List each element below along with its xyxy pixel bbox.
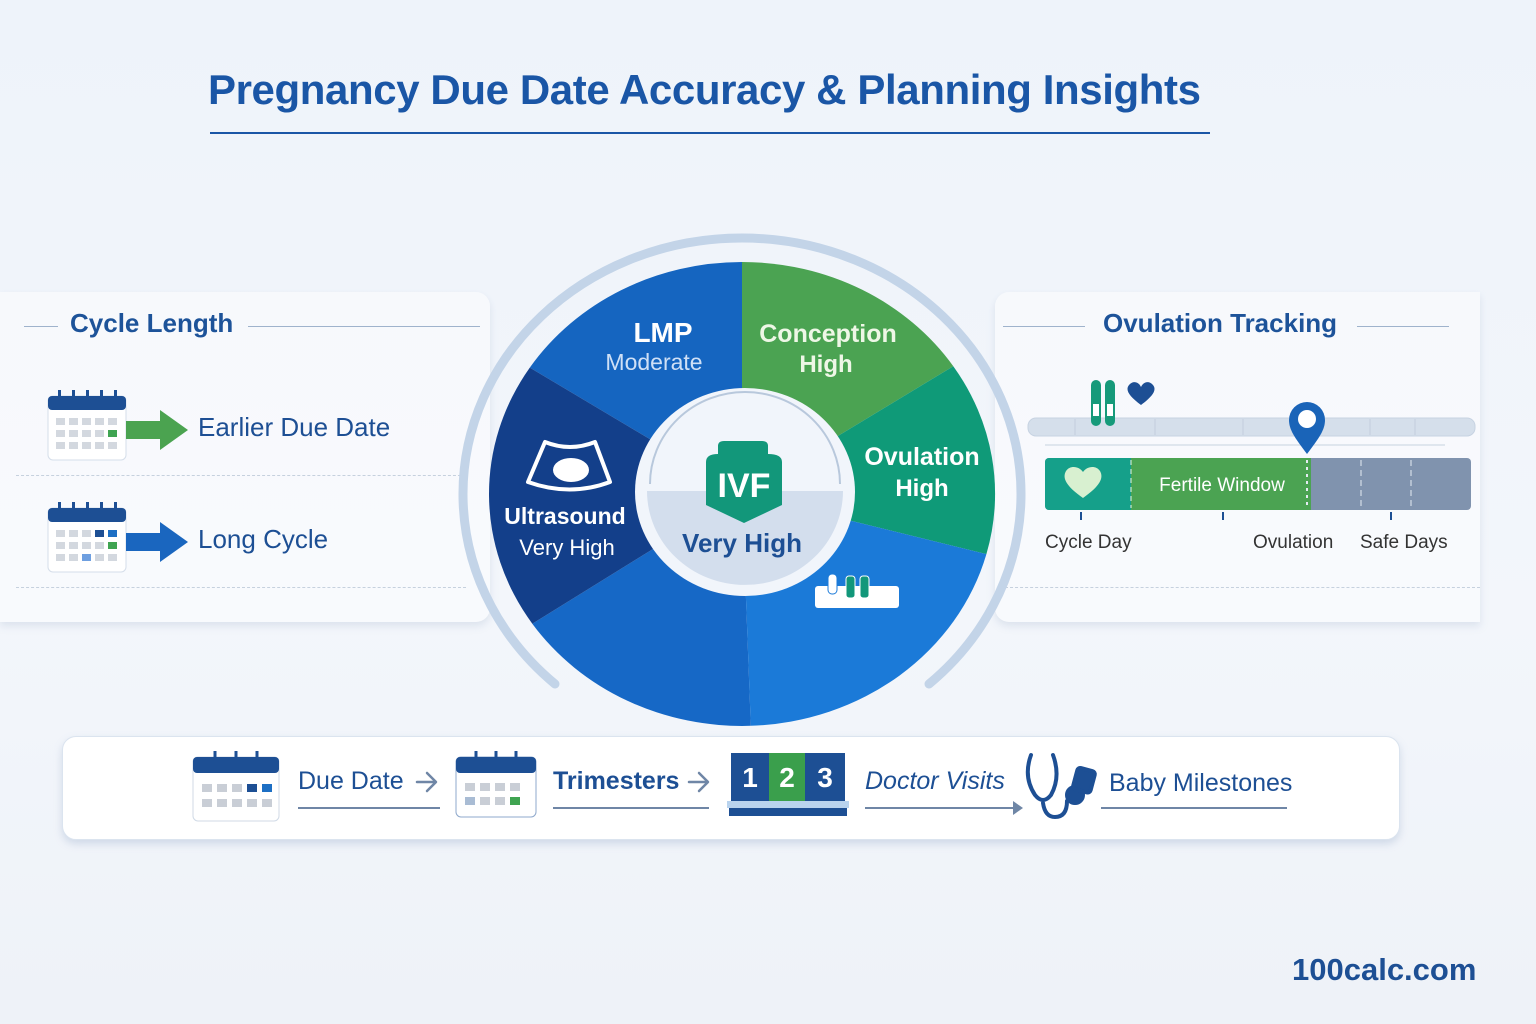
heading: ovulation tracking: Ovulation Tracking <box>1103 308 1337 338</box>
timeline chart: Cycle Day <box>1045 532 1132 553</box>
segment: lower right <box>742 494 986 726</box>
flow text: Due Date <box>298 767 404 795</box>
icon: test tubes tray <box>815 574 899 608</box>
arrows <box>417 773 708 791</box>
icon: calendar due date <box>193 751 279 821</box>
icon: calendar trimesters <box>456 751 536 817</box>
segment: ultrasound <box>489 368 742 624</box>
label: LMP: LMP <box>633 317 693 348</box>
label: ultrasound <box>504 503 626 560</box>
icon: stethoscope <box>1028 755 1096 817</box>
title: Pregnancy Due Date Accuracy & Planning Insights <box>208 66 1201 113</box>
icon: ultrasound scan <box>528 442 610 490</box>
icon: 1 2 3 blocks: 3 <box>817 762 833 793</box>
icon: location pin <box>1289 402 1325 454</box>
label: LMP <box>605 317 703 375</box>
center hub <box>635 388 855 596</box>
label: conception: Conception <box>759 320 897 348</box>
row: long cycle: Long Cycle <box>198 524 328 554</box>
segment: LMP <box>530 262 742 494</box>
panel: planning flow bar: Doctor Visits <box>865 767 1005 795</box>
timeline chart: Fertile Window <box>1159 475 1285 496</box>
label: ultrasound: Ultrasound <box>504 503 626 529</box>
icon: 1 2 3 blocks <box>727 753 849 816</box>
panel: ovulation tracking <box>995 292 1480 622</box>
center hub: Very High <box>682 528 802 558</box>
icon: heart <box>1128 382 1154 405</box>
row: long cycle <box>48 502 328 572</box>
icon: test strips <box>1091 380 1115 426</box>
timeline chart: Safe Days <box>1360 532 1448 553</box>
panel: cycle length <box>0 292 490 622</box>
segment: ovulation <box>742 366 995 554</box>
icon: 1 2 3 blocks: 2 <box>779 762 795 793</box>
label: LMP: Moderate <box>605 349 703 375</box>
timeline chart: Ovulation <box>1253 532 1333 553</box>
heading: cycle length: Cycle Length <box>70 308 233 338</box>
brand: 100calc.com: 100calc.com <box>1292 952 1476 987</box>
label: ovulation <box>864 443 980 502</box>
timeline chart <box>1028 380 1476 553</box>
label: ultrasound: Very High <box>519 535 615 560</box>
label: conception <box>759 320 897 378</box>
label: ovulation: Ovulation <box>864 443 980 471</box>
center hub: IVF <box>718 467 770 505</box>
panel: planning flow bar: Baby Milestones <box>1109 769 1292 797</box>
segment: lower left <box>532 494 751 726</box>
row: earlier due date <box>48 390 390 460</box>
icon: 1 2 3 blocks: 1 <box>742 762 758 793</box>
panel: planning flow bar: Trimesters <box>553 767 679 795</box>
label: conception: High <box>799 351 853 378</box>
panel: planning flow bar <box>62 736 1400 840</box>
label: ovulation: High <box>895 475 949 502</box>
row: earlier due date: Earlier Due Date <box>198 412 390 442</box>
segment: conception <box>742 262 953 494</box>
